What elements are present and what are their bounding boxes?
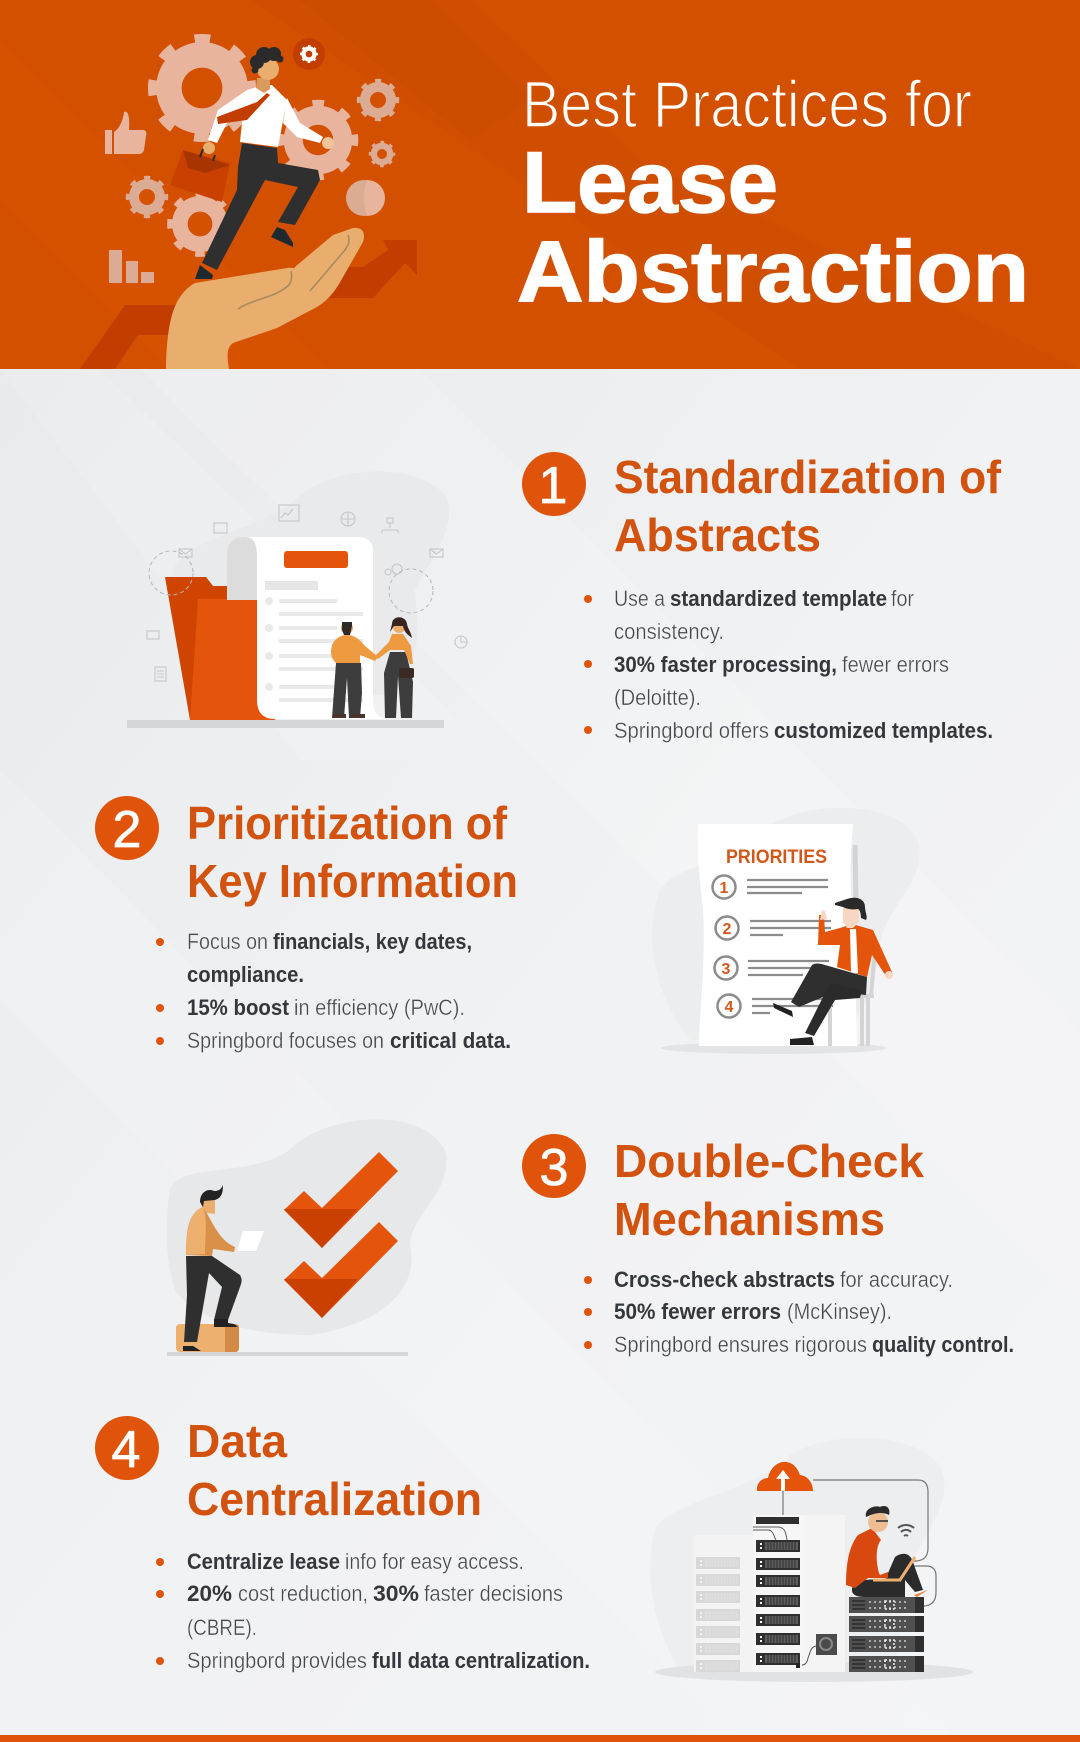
section 2 bullet list: 15% boost	[187, 995, 290, 1020]
section 3 heading: Double-Check	[614, 1135, 924, 1187]
section 3 bullet list: Cross-check abstracts	[614, 1267, 835, 1292]
section 4 bullet list: faster decisions	[424, 1581, 563, 1606]
title: Best Practices for	[522, 67, 972, 141]
title: Abstraction	[517, 224, 1029, 320]
section 4 bullet list: (CBRE).	[187, 1615, 257, 1640]
icon: growth arrow	[80, 240, 417, 369]
section 3 bullet list: Springbord ensures rigorous	[614, 1332, 867, 1357]
section 4 bullet list: 30%	[373, 1581, 419, 1606]
section 1 heading	[522, 451, 1002, 561]
connector lines	[813, 1480, 936, 1606]
section 3 bullet list: 50% fewer errors	[614, 1299, 781, 1324]
priorities sheet	[698, 824, 857, 1046]
illustration: double check	[167, 1119, 446, 1356]
section 3 bullet list: quality control.	[872, 1332, 1014, 1357]
icon: briefcase	[170, 149, 230, 202]
section 2 bullet list: critical data.	[390, 1028, 511, 1053]
section 1 bullet list: Springbord offers	[614, 718, 769, 743]
section 2 bullet list	[156, 929, 511, 1053]
section 4 bullet list: full data centralization.	[372, 1648, 590, 1673]
section 2 bullet list: in efficiency (PwC).	[294, 995, 465, 1020]
background blob	[170, 471, 449, 695]
section 3 heading	[522, 1134, 924, 1245]
seated man with laptop	[846, 1506, 928, 1597]
standing man	[183, 1185, 264, 1351]
section 3 bullet list: for accuracy.	[840, 1267, 953, 1292]
icon: pie	[346, 180, 385, 216]
woman shaking hands	[375, 617, 414, 718]
section 4 heading: Centralization	[187, 1473, 482, 1525]
section 1 heading: Standardization of	[614, 451, 1002, 503]
section 3 bullet list: (McKinsey).	[787, 1299, 892, 1324]
header illustration: man climbing on a hand	[80, 38, 417, 369]
stacked servers	[849, 1597, 924, 1672]
section 4 bullet list: 20%	[187, 1581, 232, 1606]
section 4 bullet list: Springbord provides	[187, 1648, 367, 1673]
priorities sheet: 1	[720, 880, 729, 897]
footer bar	[0, 1735, 1080, 1742]
section 1 bullet list: 30% faster processing,	[614, 652, 837, 677]
document	[227, 537, 390, 719]
icon: gear badge	[293, 38, 325, 70]
section 1 heading: 1	[539, 457, 567, 515]
section 1 bullet list: (Deloitte).	[614, 685, 701, 710]
seated man	[773, 898, 893, 1046]
section 4 bullet list: cost reduction,	[238, 1581, 368, 1606]
illustration: documents and handshake	[127, 471, 467, 728]
background blob	[652, 808, 919, 1040]
dashed circles	[149, 551, 433, 613]
section 3 heading: 3	[540, 1139, 568, 1197]
main rack	[753, 1517, 800, 1665]
section 1 bullet list: Use a	[614, 586, 666, 611]
section 1 bullet list: for	[891, 586, 914, 611]
section 2 bullet list: financials, key dates,	[273, 929, 472, 954]
icon: wifi	[898, 1525, 914, 1536]
section 1 bullet list: consistency.	[614, 619, 724, 644]
priorities sheet: PRIORITIES	[726, 847, 827, 868]
section 2 heading	[95, 796, 518, 907]
ground shadow	[661, 1042, 887, 1054]
header banner	[0, 0, 1080, 369]
icon: gears	[154, 40, 354, 253]
section 3 heading: Mechanisms	[614, 1193, 885, 1245]
folder	[165, 577, 275, 720]
illustration: data centralization	[650, 1438, 973, 1682]
hand	[166, 228, 364, 369]
ground shadow	[655, 1662, 973, 1682]
icon: check mark upper	[284, 1152, 398, 1248]
section 1 heading: Abstracts	[614, 509, 821, 561]
icon: small gears	[128, 81, 397, 216]
man shaking hands	[331, 622, 378, 718]
section 2 heading: 2	[113, 801, 141, 859]
page background	[0, 369, 1080, 1742]
section 2 bullet list: Springbord focuses on	[187, 1028, 384, 1053]
priorities sheet: 2	[723, 921, 732, 938]
section 1 bullet list	[584, 586, 993, 743]
section 4 bullet list	[156, 1549, 590, 1673]
icon: thumbs up	[105, 112, 146, 154]
floor	[127, 720, 444, 728]
section 3 bullet list	[584, 1267, 1014, 1357]
section 2 bullet list: compliance.	[187, 962, 304, 987]
background blob	[167, 1119, 446, 1335]
icon: bar chart	[109, 250, 154, 283]
section 2 heading: Prioritization of	[187, 797, 508, 849]
icon: cloud upload	[757, 1462, 813, 1515]
title	[517, 67, 1029, 320]
section 4 heading: Data	[187, 1415, 287, 1467]
title: Lease	[522, 135, 778, 231]
section 4 bullet list: info for easy access.	[345, 1549, 524, 1574]
section 2 heading: Key Information	[187, 855, 518, 907]
section 1 bullet list: standardized template	[670, 586, 887, 611]
floor	[167, 1352, 408, 1356]
section 2 bullet list: Focus on	[187, 929, 268, 954]
icon: fan box	[796, 1634, 837, 1668]
man	[195, 47, 334, 279]
priorities sheet: 3	[722, 961, 731, 978]
background blob	[650, 1438, 944, 1672]
box	[176, 1324, 239, 1352]
section 1 bullet list: fewer errors	[842, 652, 949, 677]
faded rack	[696, 1557, 740, 1672]
section 1 bullet list: customized templates.	[774, 718, 993, 743]
white server panels	[694, 1515, 845, 1672]
small outline icons	[147, 505, 467, 681]
section 4 heading	[95, 1415, 482, 1525]
chair back	[855, 845, 856, 905]
illustration: priorities list	[652, 808, 919, 1054]
priorities sheet: 4	[725, 999, 734, 1016]
section 4 heading: 4	[112, 1421, 140, 1479]
icon: check mark lower	[284, 1222, 398, 1318]
section 4 bullet list: Centralize lease	[187, 1549, 340, 1574]
